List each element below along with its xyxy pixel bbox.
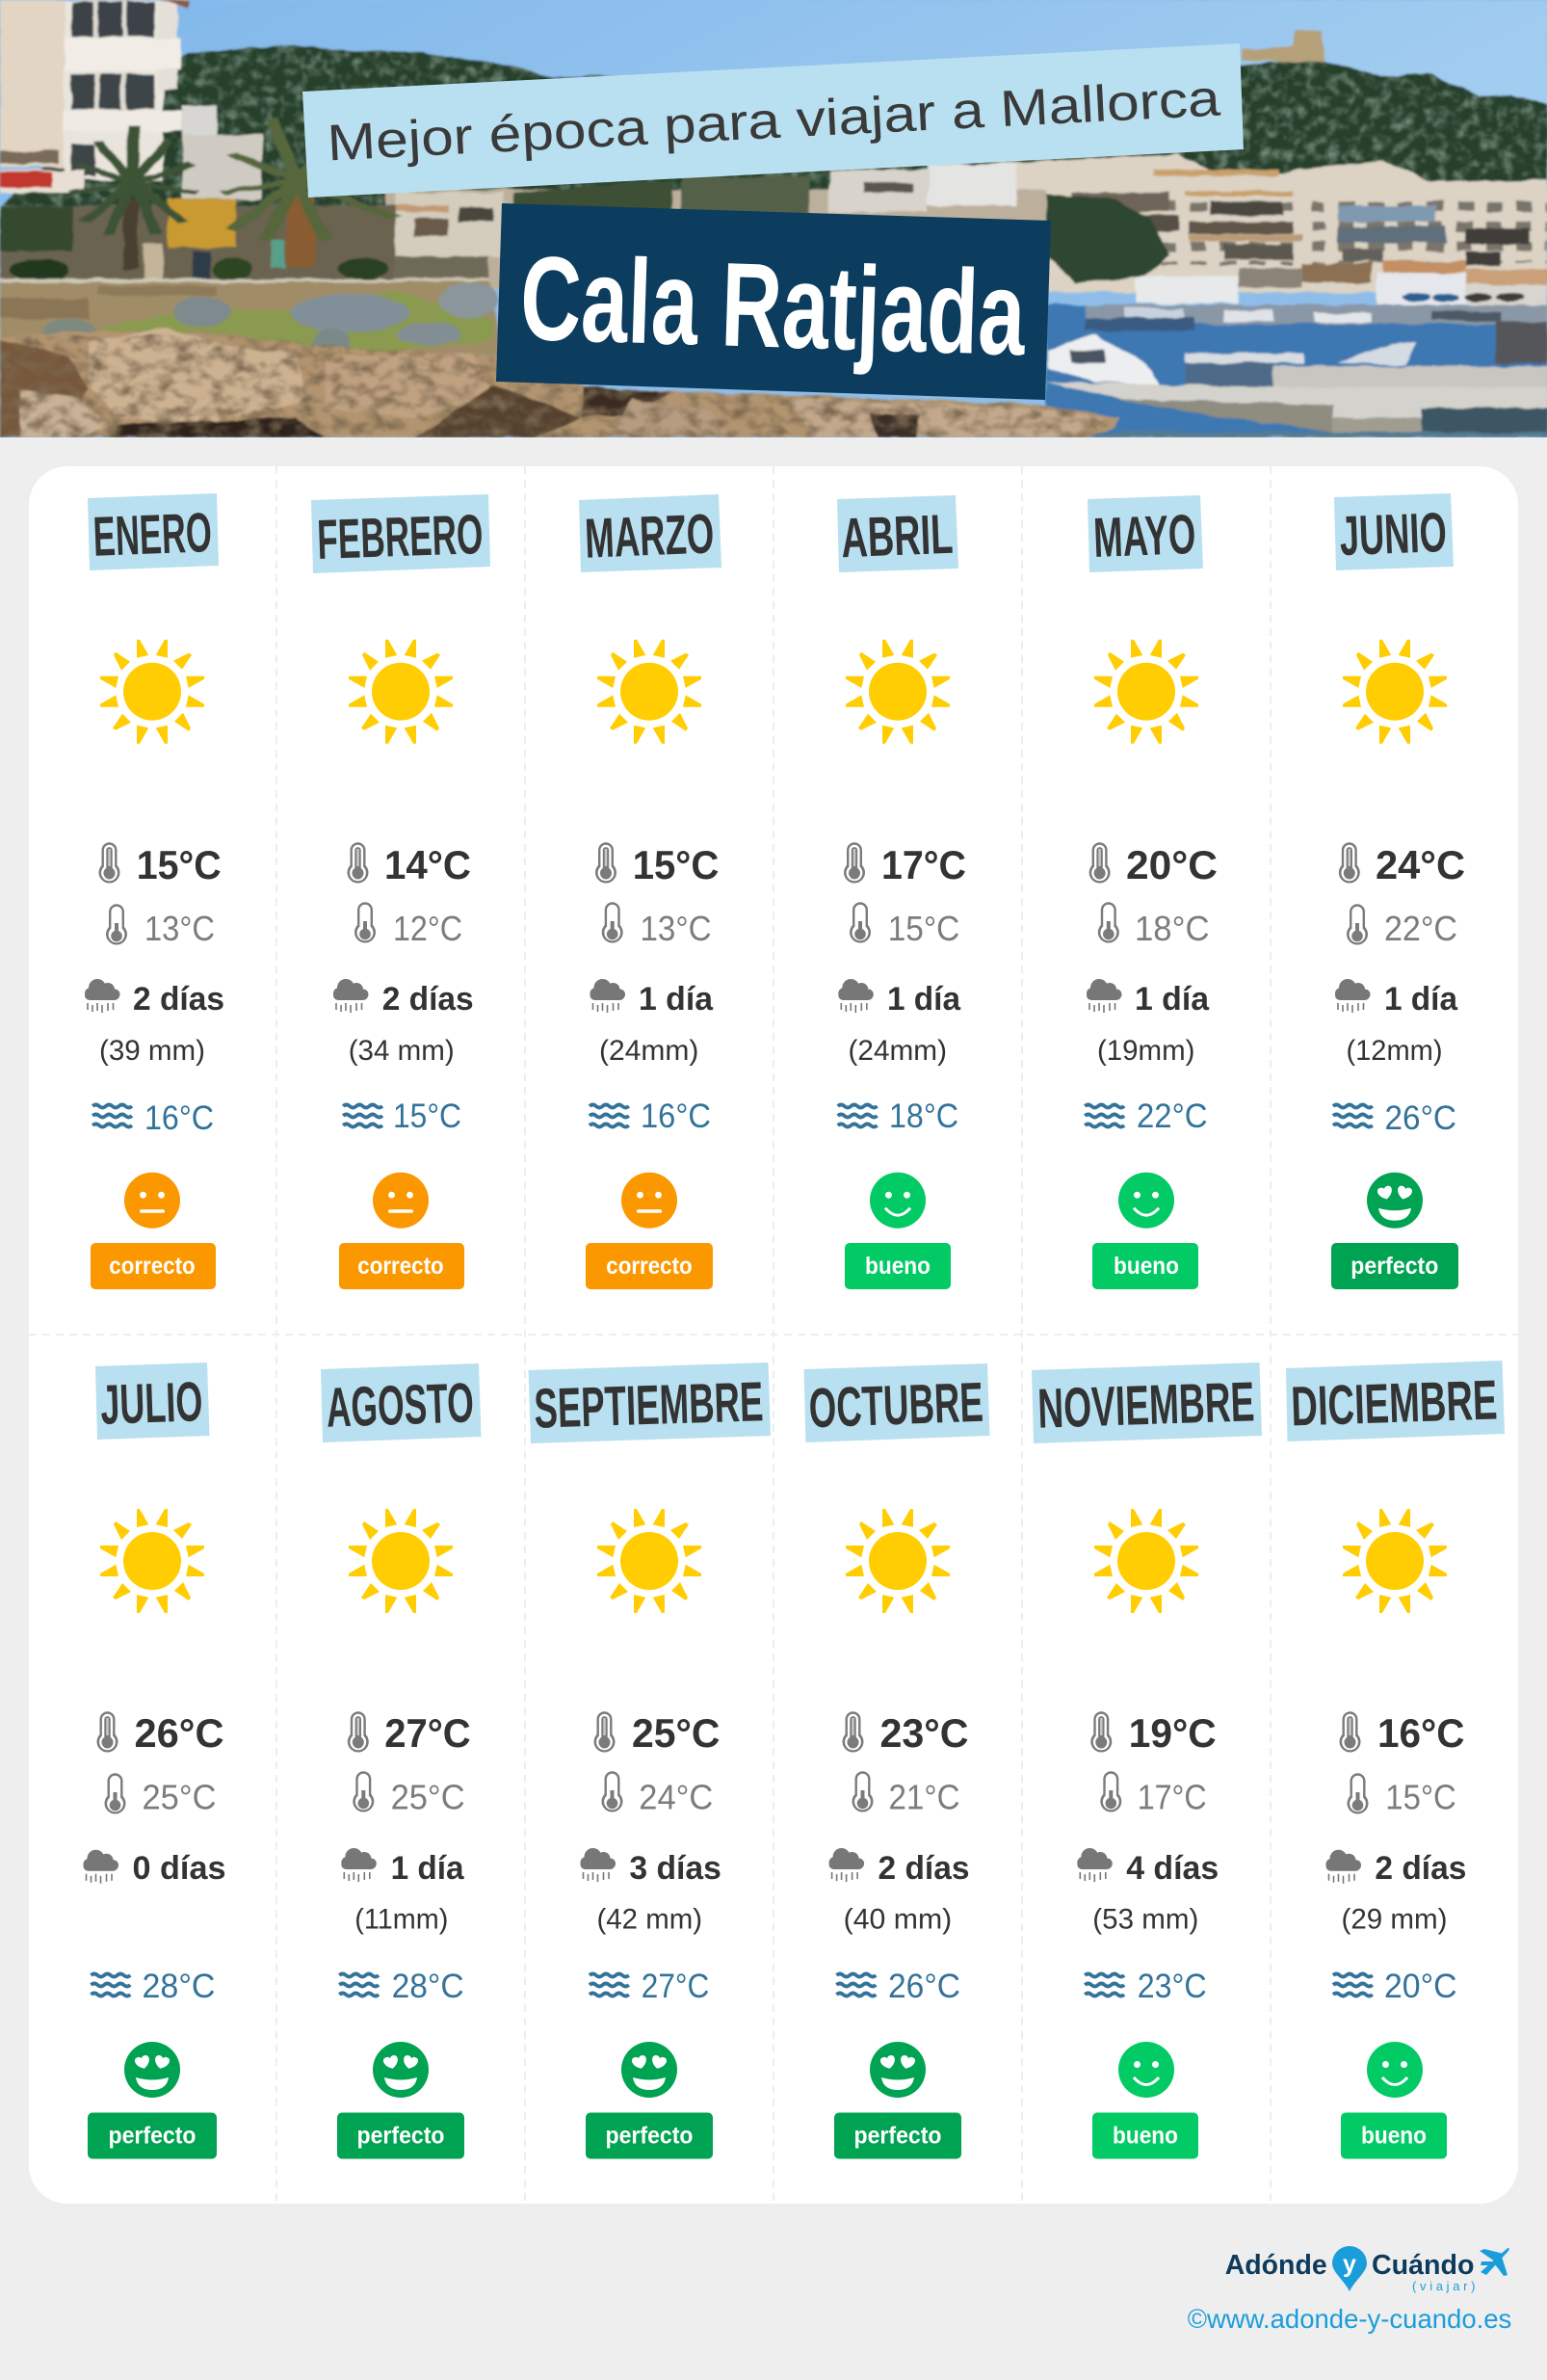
month: enero: 15°C — [137, 842, 222, 887]
sky — [0, 0, 1547, 225]
month: diciembre — [1286, 1361, 1505, 2158]
month: junio: (12mm) — [1347, 1035, 1443, 1067]
month: octubre: 2 días — [878, 1850, 969, 1887]
month: abril — [837, 495, 966, 1289]
month: noviembre: (53 mm) — [1092, 1904, 1198, 1936]
month: febrero: 14°C — [384, 842, 471, 887]
month: julio: perfecto — [108, 2122, 197, 2149]
destination banner: Cala Ratjada: Cala Ratjada — [518, 232, 1028, 381]
month: junio: 24°C — [1376, 842, 1465, 887]
stone wall — [0, 278, 504, 357]
month: julio: 25°C — [143, 1777, 216, 1816]
concrete dock — [1046, 366, 1547, 437]
month: enero: 2 días — [133, 981, 224, 1018]
month: septiembre: 25°C — [632, 1710, 721, 1756]
month: septiembre: perfecto — [605, 2122, 694, 2149]
coastal shrubs — [42, 282, 499, 351]
month: diciembre: (29 mm) — [1341, 1904, 1447, 1936]
right hand buildings — [987, 154, 1547, 306]
month: mayo: bueno — [1114, 1253, 1179, 1280]
month: marzo: 1 día — [639, 981, 714, 1018]
logo: Adónde y Cuándo: Cuándo — [1372, 2250, 1474, 2281]
month: noviembre: 4 días — [1126, 1850, 1219, 1887]
month: diciembre: 20°C — [1384, 1968, 1456, 2005]
destination banner: Cala Ratjada — [496, 203, 1051, 400]
month: agosto: 27°C — [384, 1710, 471, 1756]
month: marzo: MARZO — [584, 502, 715, 570]
month: enero: ENERO — [92, 501, 213, 569]
month: abril: (24mm) — [848, 1035, 947, 1067]
harbour water — [1046, 305, 1547, 437]
month: marzo: (24mm) — [599, 1035, 698, 1067]
month: marzo — [579, 494, 721, 1289]
month: marzo: 15°C — [633, 842, 719, 887]
month: enero: 16°C — [144, 1099, 214, 1137]
icon: location pin — [1332, 2246, 1367, 2291]
month: marzo: correcto — [606, 1253, 693, 1280]
month: enero — [85, 493, 224, 1289]
month: junio: 26°C — [1385, 1099, 1456, 1137]
month: junio — [1331, 493, 1465, 1289]
moored boats — [1048, 305, 1547, 387]
month: octubre: (40 mm) — [844, 1904, 952, 1936]
month: junio: 1 día — [1384, 981, 1458, 1018]
month: junio: JUNIO — [1339, 501, 1448, 568]
wooded hills — [0, 45, 1547, 205]
month: julio: 0 días — [133, 1850, 225, 1887]
month: noviembre: 19°C — [1129, 1710, 1217, 1756]
month: noviembre: bueno — [1113, 2122, 1178, 2149]
limestone rocks — [0, 328, 1120, 437]
month: abril: 1 día — [887, 981, 961, 1018]
month: noviembre: 17°C — [1138, 1777, 1207, 1816]
month: septiembre: SEPTIEMBRE — [533, 1370, 764, 1441]
month: enero: correcto — [109, 1253, 196, 1280]
month: febrero: 12°C — [393, 909, 462, 948]
month: agosto: (11mm) — [354, 1904, 448, 1936]
month: octubre: perfecto — [853, 2122, 942, 2149]
month: junio: perfecto — [1350, 1253, 1438, 1280]
month: marzo: 16°C — [641, 1097, 711, 1135]
month: mayo — [1085, 495, 1218, 1289]
hill tree texture — [0, 45, 1547, 205]
month: febrero: 15°C — [393, 1097, 461, 1135]
month: noviembre: NOVIEMBRE — [1036, 1370, 1255, 1441]
month: mayo: 18°C — [1135, 909, 1210, 948]
hilltop tower — [1242, 31, 1324, 61]
month: septiembre: 3 días — [629, 1850, 721, 1887]
month: septiembre: 24°C — [639, 1777, 713, 1816]
rock surface texture — [0, 334, 1120, 437]
title banner: Mejor época para viajar a Mallorca — [302, 43, 1244, 198]
month: noviembre: 23°C — [1138, 1968, 1207, 2005]
month: agosto: 25°C — [391, 1777, 465, 1816]
promenade, palm trees and people — [0, 119, 488, 282]
month: diciembre: 16°C — [1377, 1710, 1464, 1756]
title banner: Mejor época para viajar a Mallorca: Mejor época para viajar a Mallorca — [326, 70, 1222, 172]
month: septiembre: (42 mm) — [597, 1904, 702, 1936]
month: febrero — [311, 494, 490, 1289]
icon: location pin: y — [1343, 2251, 1356, 2278]
month: diciembre: bueno — [1361, 2122, 1427, 2149]
month: julio — [83, 1362, 225, 2158]
month: mayo: 22°C — [1137, 1097, 1208, 1135]
month: mayo: (19mm) — [1097, 1035, 1194, 1067]
month: enero: (39 mm) — [99, 1035, 205, 1067]
month: agosto: AGOSTO — [326, 1371, 475, 1440]
left hotel building — [0, 0, 262, 199]
month: enero: 13°C — [144, 909, 215, 948]
month: octubre: 21°C — [888, 1777, 959, 1816]
panel: monthly climate table — [29, 466, 1518, 2204]
month: diciembre: 15°C — [1385, 1777, 1456, 1816]
month: noviembre — [1032, 1362, 1262, 2158]
website credit: ©www.adonde-y-cuando.es — [1188, 2304, 1511, 2334]
month: julio: JULIO — [99, 1370, 203, 1437]
month: abril: bueno — [865, 1253, 931, 1280]
month: octubre: OCTUBRE — [808, 1371, 984, 1440]
month: diciembre: 2 días — [1375, 1850, 1466, 1887]
centre buildings beneath banners — [385, 164, 1046, 289]
month: octubre — [803, 1363, 990, 2158]
month: septiembre: 27°C — [642, 1968, 709, 2005]
month: junio: 22°C — [1384, 909, 1457, 948]
icon: airplane — [1480, 2248, 1509, 2276]
month: abril: 18°C — [889, 1097, 958, 1135]
month: abril: 15°C — [888, 909, 959, 948]
month: agosto — [321, 1363, 482, 2158]
logo: Adónde y Cuándo — [1225, 2246, 1509, 2293]
logo: Adónde y Cuándo: Adónde — [1225, 2250, 1327, 2281]
month: febrero: FEBRERO — [316, 503, 484, 571]
month: octubre: 23°C — [880, 1710, 969, 1756]
month: octubre: 26°C — [888, 1968, 960, 2005]
hero photo: Cala Ratjada harbour — [0, 0, 1547, 437]
month: julio: 28°C — [143, 1968, 216, 2005]
month: febrero: 2 días — [382, 981, 474, 1018]
month: mayo: 20°C — [1126, 842, 1218, 887]
month: agosto: perfecto — [356, 2122, 445, 2149]
month: abril: 17°C — [881, 842, 966, 887]
month: julio: 26°C — [135, 1710, 223, 1756]
month: marzo: 13°C — [640, 909, 711, 948]
month: febrero: (34 mm) — [349, 1035, 455, 1067]
logo: Adónde y Cuándo: (viajar) — [1412, 2279, 1476, 2293]
month: febrero: correcto — [357, 1253, 444, 1280]
month: mayo: MAYO — [1092, 503, 1196, 569]
month: mayo: 1 día — [1135, 981, 1210, 1018]
month: agosto: 28°C — [392, 1968, 464, 2005]
month: agosto: 1 día — [391, 1850, 465, 1887]
month: abril: ABRIL — [840, 503, 954, 569]
month: septiembre — [528, 1362, 771, 2158]
